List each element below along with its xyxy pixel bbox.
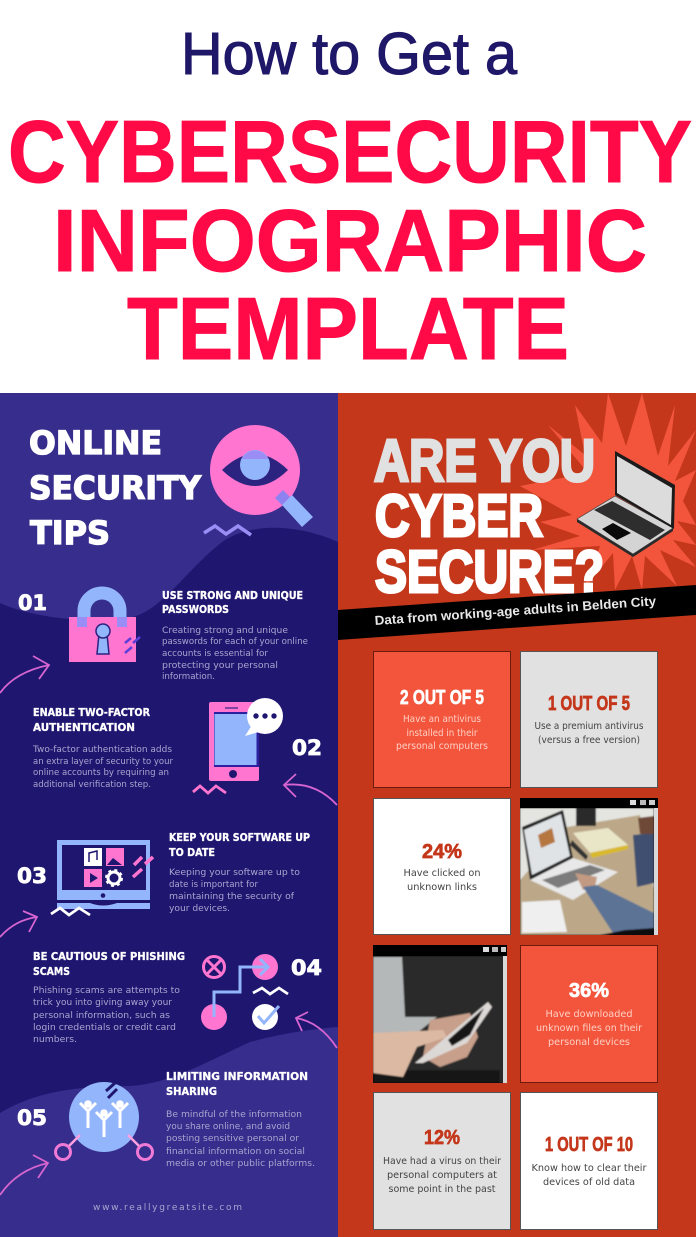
- arrow 3: [0, 911, 37, 937]
- stat card: 1 out of 10: devices of old data: [543, 1177, 635, 1188]
- heading: [29, 424, 202, 552]
- icon: flow path with check: [201, 954, 288, 1030]
- number 05: 05: [17, 1106, 47, 1130]
- text: phishing tip: numbers.: [33, 1035, 77, 1045]
- stat card: 12%: some point in the past: [388, 1184, 496, 1195]
- icon: laptop: [577, 451, 675, 557]
- panel: online security tips: [0, 393, 338, 1237]
- stat card: 12%: personal computers at: [387, 1170, 497, 1181]
- text: information sharing tip: LIMITING INFORMATION: [166, 1071, 308, 1083]
- title: TEMPLATE: [127, 279, 569, 378]
- text: information sharing tip: SHARING: [166, 1086, 217, 1098]
- text: software tip: [169, 832, 310, 914]
- step 04: [33, 951, 337, 1048]
- icon: padlock: [69, 593, 140, 662]
- icon: magnifier with eye: [210, 425, 313, 527]
- stat card: 36%: personal devices: [548, 1037, 630, 1048]
- text: passwords tip: protecting your personal: [162, 661, 278, 671]
- stat card: 1 out of 5: Use a premium antivirus: [534, 721, 644, 732]
- text: two-factor tip: additional verification step.: [33, 780, 151, 790]
- stat card: 24%: 24%: [422, 841, 462, 863]
- stat card: 2 out of 5: personal computers: [396, 741, 488, 752]
- dark wave background: [0, 528, 338, 1113]
- stat card: 12%: 12%: [424, 1127, 460, 1149]
- text: two-factor tip: an extra layer of security to your: [33, 757, 173, 767]
- stat card: 12%: [374, 1092, 510, 1230]
- text: two-factor tip: online accounts by requiring an: [33, 768, 169, 778]
- title: How to Get a: [181, 21, 517, 87]
- heading: [374, 428, 604, 605]
- text: passwords tip: [162, 590, 308, 682]
- text: information sharing tip: [166, 1071, 315, 1169]
- number 01: 01: [18, 591, 47, 615]
- text: two-factor tip: Two-factor authentication adds: [32, 745, 172, 755]
- stat card: 36%: [520, 946, 658, 1082]
- text: phishing tip: BE CAUTIOUS OF PHISHING: [33, 951, 185, 963]
- text: software tip: date is important for: [169, 880, 258, 890]
- title: INFOGRAPHIC: [53, 191, 647, 290]
- text: two-factor tip: [32, 707, 173, 790]
- arrow 5: [0, 1155, 48, 1195]
- text: passwords tip: USE STRONG AND UNIQUE: [162, 590, 303, 602]
- stat card: 1 out of 5: (versus a free version): [538, 735, 640, 746]
- text: passwords tip: information.: [162, 672, 215, 682]
- heading: SECURITY: [29, 469, 202, 507]
- heading: ONLINE: [29, 424, 162, 462]
- text: passwords tip: passwords for each of your online: [162, 637, 308, 647]
- stat card: 36%: Have downloaded: [546, 1009, 632, 1020]
- arrow 2: [284, 774, 337, 805]
- photo: hands with smartphone: [373, 945, 507, 1083]
- stat card: 1 out of 5: [520, 652, 658, 788]
- arrow 1: [0, 656, 49, 693]
- text: passwords tip: accounts is essential for: [162, 649, 268, 659]
- stat card: 1 out of 5: 1 OUT OF 5: [548, 693, 630, 715]
- icon: purple zigzag: [204, 526, 251, 535]
- text: phishing tip: trick you into giving away your: [33, 998, 172, 1008]
- text: phishing tip: Phishing scams are attempts to: [33, 986, 180, 996]
- arrow 4: [296, 1012, 337, 1048]
- icon: people in circle: [56, 1082, 152, 1160]
- number 03: 03: [17, 864, 47, 888]
- stat card: 12%: Have had a virus on their: [383, 1156, 502, 1167]
- stat card: 2 out of 5: Have an antivirus: [403, 714, 481, 725]
- text: two-factor tip: ENABLE TWO-FACTOR: [33, 707, 150, 719]
- heading: CYBER: [375, 483, 543, 549]
- number 02: 02: [292, 736, 322, 760]
- text: information sharing tip: Be mindful of the information: [166, 1110, 302, 1120]
- text: phishing tip: [33, 951, 185, 1045]
- text: phishing tip: login credentials or credit card: [33, 1023, 176, 1033]
- stat card: 24%: Have clicked on: [404, 868, 480, 879]
- stat card: 1 out of 10: [520, 1092, 658, 1230]
- icon: monitor with apps: [57, 840, 153, 909]
- stat card: 1 out of 10: Know how to clear their: [532, 1163, 647, 1174]
- text: information sharing tip: financial information on social: [166, 1147, 305, 1157]
- text: software tip: Keeping your software up to: [169, 868, 300, 878]
- stat card: 2 out of 5: installed in their: [406, 728, 478, 739]
- number 04: 04: [291, 956, 322, 980]
- stat card: 24%: unknown links: [407, 882, 477, 893]
- step 02: [32, 698, 337, 805]
- text: software tip: TO DATE: [169, 847, 215, 859]
- photo: laptop on desk: [520, 798, 658, 935]
- text: passwords tip: Creating strong and unique: [162, 626, 288, 636]
- starburst: [520, 393, 696, 590]
- stat card: 2 out of 5: [374, 652, 510, 788]
- icon: phone with chat bubble: [209, 698, 283, 781]
- stat card: 36%: 36%: [569, 980, 609, 1002]
- heading: ARE YOU: [374, 428, 595, 494]
- text: phishing tip: SCAMS: [33, 966, 70, 978]
- step 05: [0, 1071, 315, 1195]
- text: software tip: your devices.: [169, 904, 230, 914]
- text: information sharing tip: posting sensitive personal or: [166, 1134, 299, 1144]
- step 03: [0, 832, 310, 937]
- panel: are you cyber secure: [338, 393, 696, 1237]
- text: software tip: KEEP YOUR SOFTWARE UP: [169, 832, 310, 844]
- text: information sharing tip: you share online, and avoid: [166, 1122, 290, 1132]
- icon: white zigzag: [51, 908, 90, 915]
- stat card: 1 out of 10: 1 OUT OF 10: [545, 1134, 633, 1156]
- title: [8, 21, 692, 378]
- banner: [338, 585, 696, 640]
- heading: TIPS: [30, 514, 110, 552]
- step 01: [0, 590, 308, 693]
- text: information sharing tip: media or other public platforms.: [166, 1159, 315, 1169]
- banner text: Data from working-age adults in Belden City: [374, 593, 657, 628]
- stat card: 36%: unknown files on their: [536, 1023, 643, 1034]
- stat card: 2 out of 5: 2 OUT OF 5: [400, 687, 484, 709]
- footer url: www.reallygreatsite.com: [93, 1203, 242, 1213]
- text: software tip: maintaining the security of: [169, 892, 295, 902]
- stat card: 24%: [374, 798, 510, 934]
- heading: SECURE?: [375, 539, 604, 605]
- text: phishing tip: personal information, such as: [33, 1011, 170, 1021]
- text: two-factor tip: AUTHENTICATION: [33, 722, 135, 734]
- text: passwords tip: PASSWORDS: [162, 604, 229, 616]
- icon: pink zigzag: [193, 786, 226, 793]
